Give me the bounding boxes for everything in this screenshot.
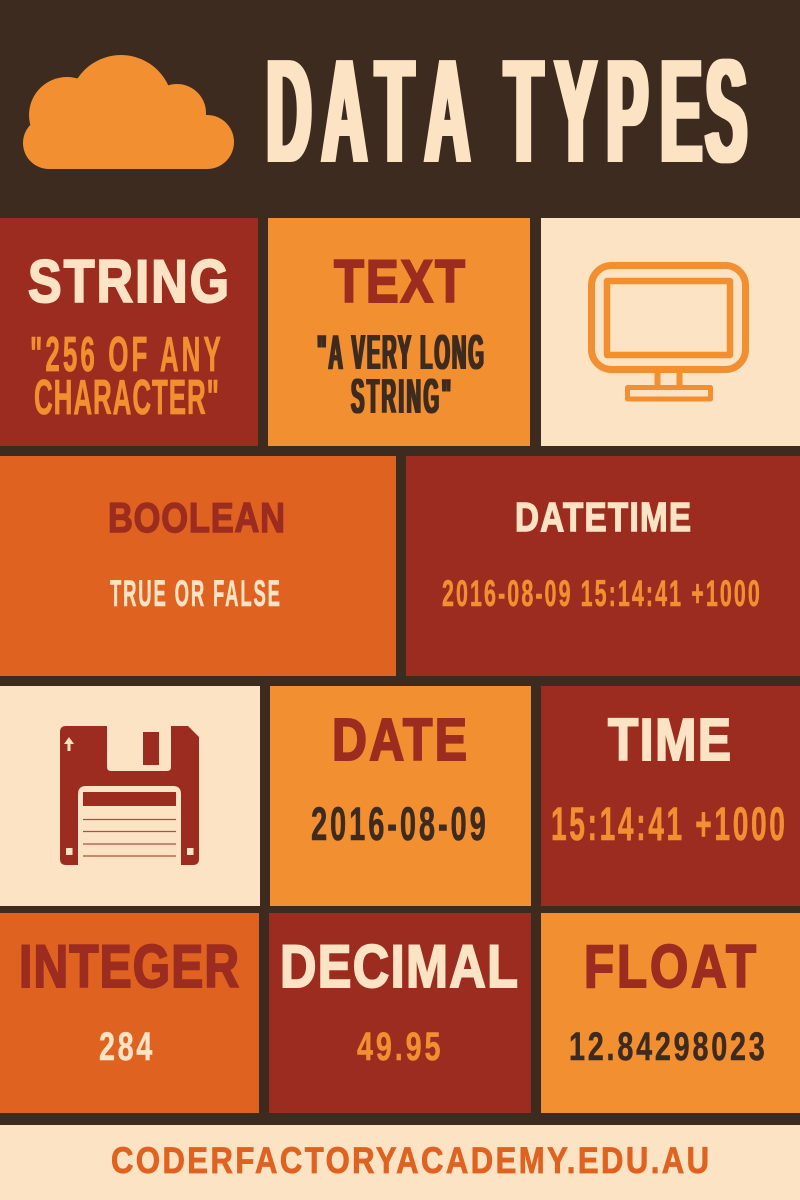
heading: string: STRING bbox=[28, 248, 229, 315]
text: datetime example: 2016-08-09 15:14:41 +1000 bbox=[442, 574, 760, 615]
text: decimal example: 49.95 bbox=[357, 1024, 441, 1069]
panel: floppy bbox=[0, 686, 260, 906]
icon: monitor bbox=[592, 266, 746, 399]
heading: datetime: DATETIME bbox=[515, 494, 691, 540]
heading: time: TIME bbox=[608, 707, 731, 773]
footer url: CODERFACTORYACADEMY.EDU.AU bbox=[111, 1141, 709, 1182]
panel: integer bbox=[0, 913, 259, 1113]
text: string example: "256 OF ANY bbox=[30, 329, 221, 382]
text: text example bbox=[317, 325, 484, 423]
text: date example: 2016-08-09 bbox=[311, 799, 486, 851]
text: string example bbox=[30, 329, 221, 425]
icon: floppy disk bbox=[60, 726, 199, 865]
panel: monitor bbox=[541, 218, 800, 446]
heading: float: FLOAT bbox=[584, 932, 756, 1000]
text: float example: 12.84298023 bbox=[569, 1024, 765, 1069]
heading: integer: INTEGER bbox=[19, 933, 239, 1000]
panel: string bbox=[0, 218, 258, 446]
panel: boolean bbox=[0, 456, 396, 676]
heading: date: DATE bbox=[332, 708, 467, 773]
panel: date bbox=[270, 686, 531, 906]
text: integer example: 284 bbox=[99, 1024, 153, 1069]
text: text example: STRING" bbox=[351, 369, 451, 423]
panel: time bbox=[541, 686, 800, 906]
panel: text bbox=[268, 218, 530, 446]
heading: decimal: DECIMAL bbox=[280, 933, 518, 1000]
text: string example: CHARACTER" bbox=[34, 372, 219, 425]
panel: float bbox=[541, 913, 800, 1113]
heading: text: TEXT bbox=[334, 247, 465, 315]
heading: boolean: BOOLEAN bbox=[108, 495, 285, 542]
panel: decimal bbox=[269, 913, 531, 1113]
text: text example: "A VERY LONG bbox=[317, 325, 484, 379]
panel: footer bbox=[0, 1125, 800, 1200]
text: time example: 15:14:41 +1000 bbox=[551, 799, 785, 851]
panel: datetime bbox=[406, 456, 800, 676]
text: boolean example: TRUE OR FALSE bbox=[110, 574, 280, 615]
title: DATA TYPES bbox=[266, 29, 747, 195]
icon: cloud bbox=[23, 55, 234, 169]
